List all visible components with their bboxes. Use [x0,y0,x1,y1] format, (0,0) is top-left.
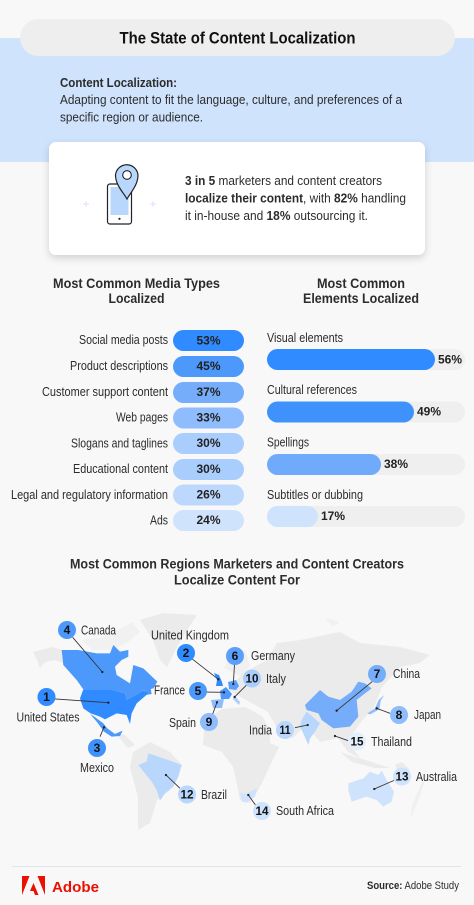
marker: 4 Canada: Canada [81,624,116,638]
marker: 13 Australia: 13 [396,770,409,784]
marker: 12 Brazil: 12 [180,788,194,802]
heading: media types: Most Common Media Types [53,276,220,291]
icon: phone with location pin [83,165,156,224]
row: ads: Ads [150,514,168,528]
row: visual elements: 56% [438,352,462,366]
row: subtitles or dubbing [267,488,465,527]
marker: 8 Japan [390,706,441,724]
map: China [305,682,372,728]
heading: elements: Most Common [317,276,405,291]
row: product descriptions: 45% [196,359,221,373]
marker: 15 Thailand [348,732,412,750]
row: visual elements [267,331,465,370]
marker: 14 South Africa: South Africa [276,804,334,818]
map: leader lines east [233,681,395,807]
marker: 9 Spain: Spain [169,716,196,730]
definition text: Adapting content to fit the language, culture, and preferences of a [60,92,403,107]
row: spellings: Spellings [267,436,309,450]
marker: 7 China [368,665,420,683]
logo: Adobe: Adobe [52,879,99,896]
map: maritime island [144,688,152,695]
marker: 5 France [154,682,207,700]
map: United States [80,689,148,724]
marker: 11 India: India [249,724,272,738]
row: educational content: 30% [196,462,221,476]
row: legal and regulatory information [11,484,244,506]
row: social media posts: Social media posts [79,333,168,347]
heading: media types: Localized [108,291,164,306]
marker: 14 South Africa [253,802,334,820]
map: Japan [367,695,384,714]
definition text: Content Localization: [60,76,177,90]
row: web pages: Web pages [116,410,168,424]
marker: 15 Thailand: Thailand [371,735,412,749]
statistic text [185,173,406,223]
marker: 1 United States [16,688,80,724]
row: product descriptions: Product descriptions [70,359,168,373]
chart: elements [267,331,465,527]
marker: 10 Italy [243,670,287,688]
map: Canada [62,645,157,700]
marker: 3 Mexico: 3 [94,741,101,755]
row: visual elements: Visual elements [267,331,343,345]
statistic text: 3 in 5 marketers and content creators [185,173,382,188]
row: educational content: Educational content [73,462,168,476]
source: Source: Adobe Study [367,880,459,892]
marker: 4 Canada: 4 [64,623,71,637]
row: ads: 24% [196,513,221,527]
row: cultural references: 49% [417,404,441,418]
marker: 8 Japan: Japan [414,708,441,722]
row: web pages [116,408,244,428]
row: educational content [73,459,244,480]
marker: 1 United States: United States [16,710,80,724]
row: subtitles or dubbing: 17% [321,509,345,523]
footer divider [12,866,461,867]
marker: 4 Canada [58,621,116,639]
chart: media types [11,330,244,531]
marker: 2 United Kingdom: United Kingdom [151,628,229,642]
row: spellings: 38% [384,457,408,471]
row: customer support content: 37% [196,385,221,399]
blue header band [0,38,474,162]
row: slogans and taglines: 30% [196,436,221,450]
heading: media types [53,276,220,306]
map: South Africa [240,788,257,803]
row: cultural references: Cultural references [267,383,357,397]
definition text [60,76,403,124]
marker: 5 France: France [154,684,185,698]
heading: regions: Localize Content For [174,572,301,588]
marker: 8 Japan: 8 [396,708,403,722]
statistic text: localize their content, with 82% handling [185,190,406,206]
row: web pages: 33% [196,410,221,424]
logo: Adobe [22,876,99,896]
marker: 15 Thailand: 15 [350,734,364,748]
marker: 10 Italy: 10 [246,672,259,686]
title [20,19,455,56]
marker: 3 Mexico [80,739,114,775]
row: customer support content: Customer support content [42,385,168,399]
row: legal and regulatory information: 26% [196,488,221,502]
marker: 9 Spain [169,713,218,731]
row: spellings [267,436,465,475]
world map [16,613,457,830]
marker: 12 Brazil: Brazil [201,788,227,802]
marker: 11 India: 11 [280,723,291,737]
marker: 9 Spain: 9 [206,715,213,729]
map: leader lines [55,637,235,788]
panel: key statistic card [49,142,425,255]
row: customer support content [42,382,244,403]
row: cultural references [267,383,465,422]
marker: 13 Australia: Australia [416,770,457,784]
heading: regions [70,556,404,588]
marker: 2 United Kingdom [151,628,229,662]
row: slogans and taglines [71,433,244,454]
row: ads [150,510,244,531]
heading: elements: Elements Localized [303,291,419,306]
row: subtitles or dubbing: Subtitles or dubbing [267,488,363,502]
title: The State of Content Localization [120,28,356,48]
map: Mexico [90,714,123,737]
marker: 11 India [249,721,294,739]
marker: 2 United Kingdom: 2 [183,646,190,660]
marker: 13 Australia [393,768,457,786]
row: social media posts: 53% [196,334,221,348]
marker: 6 Germany: 6 [232,649,239,663]
marker: 1 United States: 1 [43,690,50,704]
marker: 10 Italy: Italy [266,672,287,686]
row: social media posts [79,330,244,351]
marker: 7 China: 7 [374,667,381,681]
map: India [300,712,320,745]
row: slogans and taglines: Slogans and taglines [71,436,168,450]
map: Australia [348,771,394,807]
heading: elements [303,276,419,306]
marker: 3 Mexico: Mexico [80,761,114,775]
row: legal and regulatory information: Legal and regulatory information [11,488,168,502]
row: product descriptions [70,356,244,377]
statistic text: it in-house and 18% outsourcing it. [185,208,368,223]
marker: 7 China: China [393,667,420,681]
map: Europe countries [211,673,240,708]
marker: 12 Brazil [178,786,227,804]
map: Brazil [138,753,182,801]
marker: 14 South Africa: 14 [256,804,269,818]
definition text: specific region or audience. [60,110,203,124]
marker: 6 Germany [226,647,296,665]
marker: 5 France: 5 [195,684,202,698]
marker: 6 Germany: Germany [251,649,296,663]
heading: regions: Most Common Regions Marketers and Content Creators [70,556,404,572]
map: grey land [33,613,430,830]
